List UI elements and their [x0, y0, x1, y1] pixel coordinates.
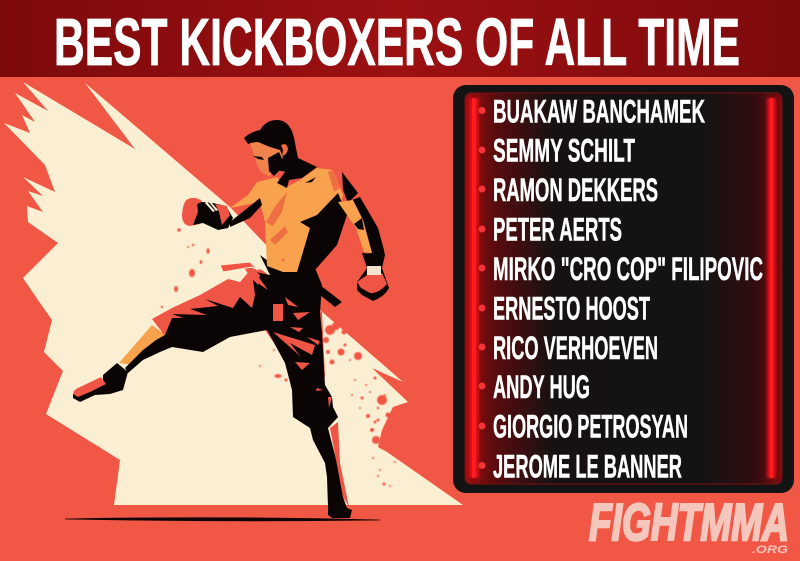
ground shadow [65, 518, 380, 521]
right glove [357, 253, 389, 301]
list names [493, 94, 763, 484]
kicking leg skin [119, 325, 167, 365]
shorts and standing leg black [125, 255, 352, 518]
logo: .ORG [752, 544, 789, 556]
fighter figure [73, 120, 389, 518]
cream burst shape [4, 82, 463, 505]
shorts red fabric [152, 268, 325, 380]
face shadow [253, 152, 285, 176]
right arm [338, 197, 385, 256]
list bullets [478, 107, 486, 469]
list names: RICO VERHOEVEN [493, 330, 658, 366]
list names: SEMMY SCHILT [493, 133, 635, 169]
belt [220, 262, 342, 307]
kicking foot [73, 363, 128, 402]
panel frame [453, 85, 794, 493]
left glove [182, 198, 233, 230]
left arm [230, 198, 262, 227]
shorts folds red [240, 262, 349, 507]
list names: PETER AERTS [493, 212, 622, 248]
left neon bar [469, 98, 479, 478]
list names: RAMON DEKKERS [493, 172, 658, 208]
head [244, 120, 297, 172]
torso shadow [297, 172, 358, 272]
ear [281, 144, 288, 156]
panel: kickboxer list [453, 85, 794, 493]
torso skin [230, 168, 343, 272]
torso muscle tones [266, 170, 340, 262]
neck [275, 138, 317, 188]
list names: ERNESTO HOOST [493, 290, 650, 326]
face [250, 142, 283, 177]
header bar [0, 0, 800, 77]
panel inner glow [465, 93, 782, 484]
right neon bar [767, 98, 776, 478]
red paint splatter [85, 228, 396, 487]
list names: ANDY HUG [493, 369, 590, 405]
